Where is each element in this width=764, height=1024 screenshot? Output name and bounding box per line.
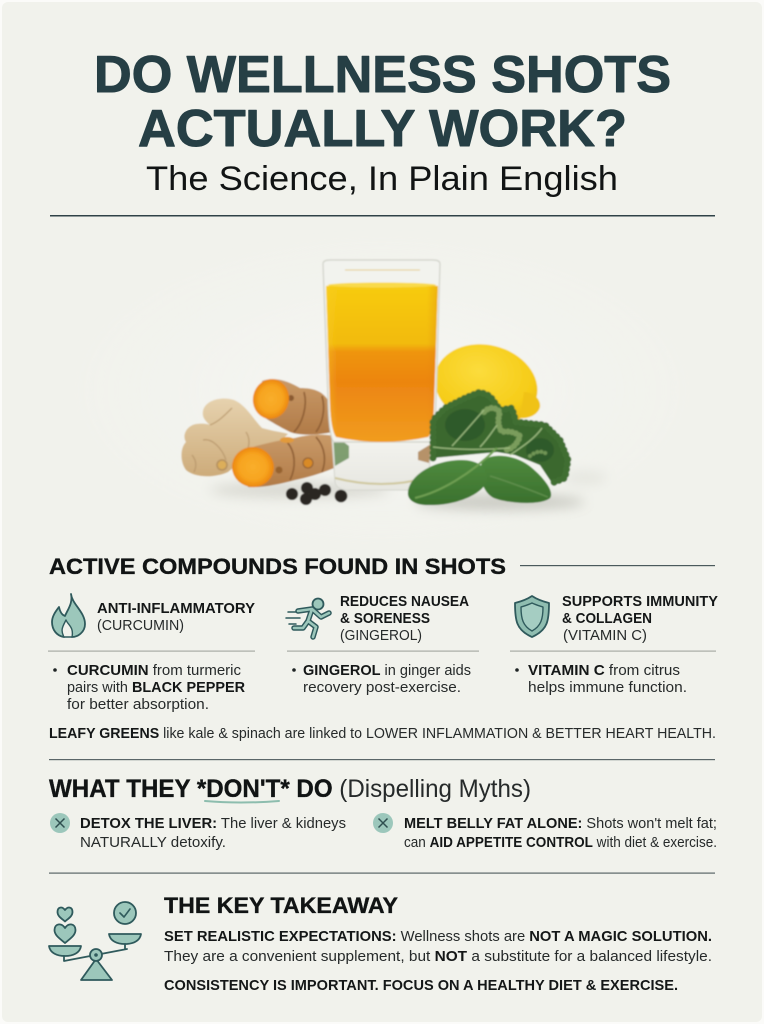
title: ACTUALLY WORK?: [138, 100, 627, 158]
panel: key takeaway: [164, 893, 712, 994]
icon: upper turmeric root: [249, 376, 332, 435]
panel: immunity and collagen: [510, 593, 718, 696]
bullet text: [515, 662, 687, 696]
icon: running figure: [286, 598, 329, 637]
myth: detox the liver: [50, 813, 346, 851]
panel: immunity and collagen: & COLLAGEN: [562, 610, 652, 627]
panel: anti-inflammatory: [48, 594, 255, 713]
icon: x badge: [50, 813, 70, 833]
icon: x badge: [373, 813, 393, 833]
section heading: active compounds: ACTIVE COMPOUNDS FOUND IN SHOTS: [49, 554, 506, 579]
icon: black peppercorns: [286, 482, 347, 505]
myth: detox the liver: NATURALLY detoxify.: [80, 834, 226, 851]
icon: lemon: [426, 334, 546, 436]
myth: melt belly fat: can AID APPETITE CONTROL with diet & exercise.: [404, 834, 717, 851]
icon: ginger root: [182, 398, 288, 476]
icon: balance scale: [49, 902, 141, 980]
bullet text: VITAMIN C from citrus: [528, 662, 680, 679]
title: DO WELLNESS SHOTS: [94, 46, 671, 104]
body text: They are a convenient supplement, but NOT a substitute for a balanced lifestyle.: [164, 948, 712, 965]
icon: flame: [52, 594, 85, 637]
body text: [164, 928, 712, 994]
title: [94, 46, 671, 158]
heading: REDUCES NAUSEA: [340, 593, 469, 610]
heading: SUPPORTS IMMUNITY: [562, 593, 718, 610]
leafy greens note: LEAFY GREENS like kale & spinach are linked to LOWER INFLAMMATION & BETTER HEART HEALTH.: [49, 725, 716, 742]
icon: lower turmeric root: [229, 435, 334, 490]
icon: shot glass: [323, 260, 440, 490]
bullet text: [53, 662, 245, 713]
bullet text: GINGEROL in ginger aids: [303, 662, 471, 679]
myth: melt belly fat: MELT BELLY FAT ALONE: Shots won't melt fat;: [404, 815, 717, 832]
panel: nausea and soreness: [286, 593, 479, 696]
section heading: what they don't do: WHAT THEY *DON'T* DO (Dispelling Myths): [49, 775, 531, 803]
heading: ANTI-INFLAMMATORY: [97, 600, 255, 617]
bullet text: pairs with BLACK PEPPER: [67, 679, 245, 696]
panel: nausea and soreness: (GINGEROL): [340, 627, 422, 644]
hero illustration: shot and ingredients: [62, 230, 702, 550]
bullet text: recovery post-exercise.: [303, 679, 461, 696]
bullet text: helps immune function.: [528, 679, 687, 696]
panel: nausea and soreness: & SORENESS: [340, 610, 430, 627]
bullet text: CURCUMIN from turmeric: [67, 662, 241, 679]
body text: CONSISTENCY IS IMPORTANT. FOCUS ON A HEALTHY DIET & EXERCISE.: [164, 977, 678, 994]
subtitle: The Science, In Plain English: [146, 160, 618, 198]
myth: melt belly fat: [373, 813, 717, 851]
icon: shield: [515, 596, 549, 637]
heading: THE KEY TAKEAWAY: [164, 893, 398, 918]
body text: SET REALISTIC EXPECTATIONS: Wellness shots are NOT A MAGIC SOLUTION.: [164, 928, 712, 945]
bullet text: [292, 662, 471, 696]
panel: immunity and collagen: (VITAMIN C): [563, 627, 647, 644]
icon: spinach leaves: [408, 448, 551, 505]
bullet text: for better absorption.: [67, 696, 209, 713]
icon: kale: [433, 392, 568, 483]
myth: detox the liver: DETOX THE LIVER: The liver & kidneys: [80, 815, 346, 832]
panel: anti-inflammatory: (CURCUMIN): [97, 617, 184, 634]
